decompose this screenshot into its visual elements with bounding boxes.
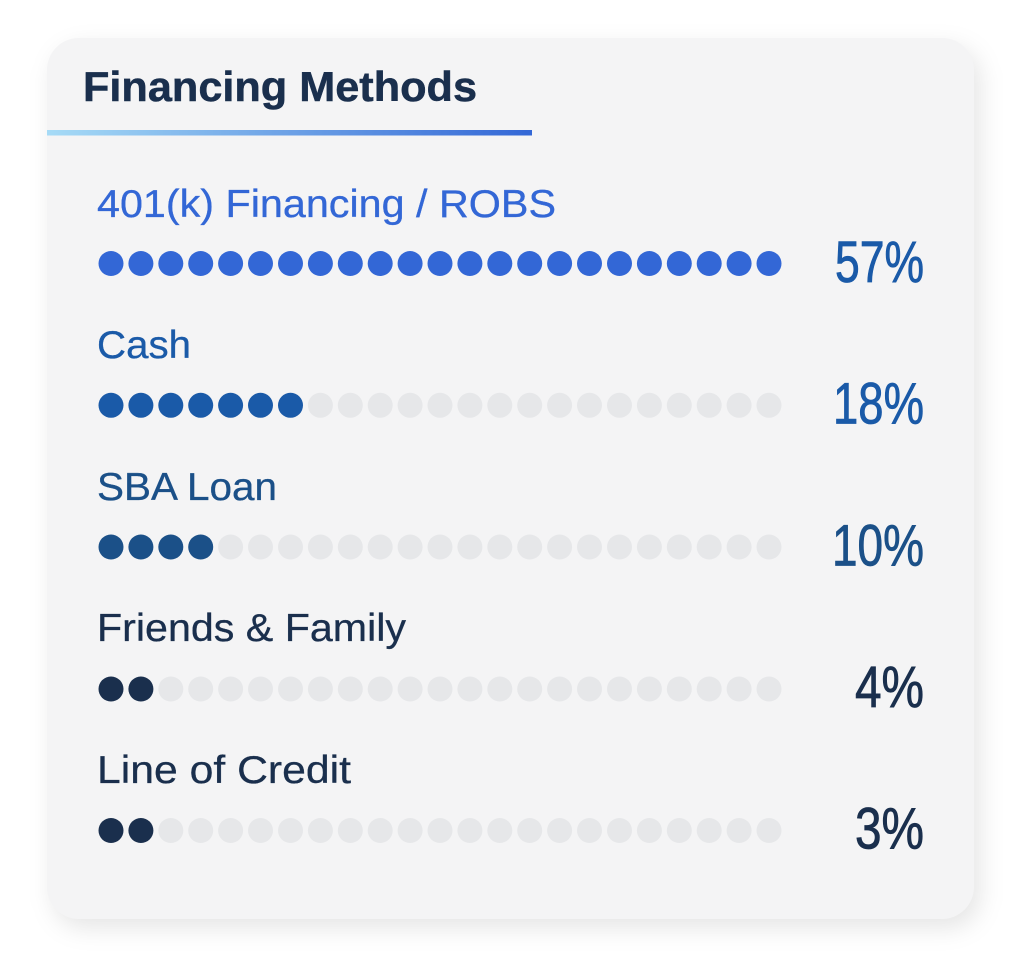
dot meter: [98, 676, 782, 702]
percentage: 57%: [835, 230, 924, 295]
row: SBA Loan: [97, 466, 924, 578]
row: Friends & Family: [97, 607, 924, 720]
row: Cash: [97, 324, 924, 437]
row: Line of Credit: [97, 749, 924, 862]
heading underline: [47, 130, 532, 136]
dot meter: [98, 534, 782, 560]
label: Line of Credit: [97, 749, 351, 792]
label: Cash: [97, 324, 191, 367]
percentage: 10%: [832, 514, 924, 578]
heading: Financing Methods: [83, 63, 477, 110]
dot meter: [98, 251, 782, 276]
percentage: 18%: [833, 372, 924, 437]
dot meter: [98, 393, 782, 418]
label: 401(k) Financing / ROBS: [97, 183, 556, 226]
percentage: 3%: [855, 796, 924, 862]
row: 401(k) Financing / ROBS: [97, 183, 924, 295]
label: SBA Loan: [97, 466, 277, 509]
label: Friends & Family: [97, 607, 407, 650]
percentage: 4%: [855, 655, 924, 720]
dot meter: [98, 818, 782, 843]
